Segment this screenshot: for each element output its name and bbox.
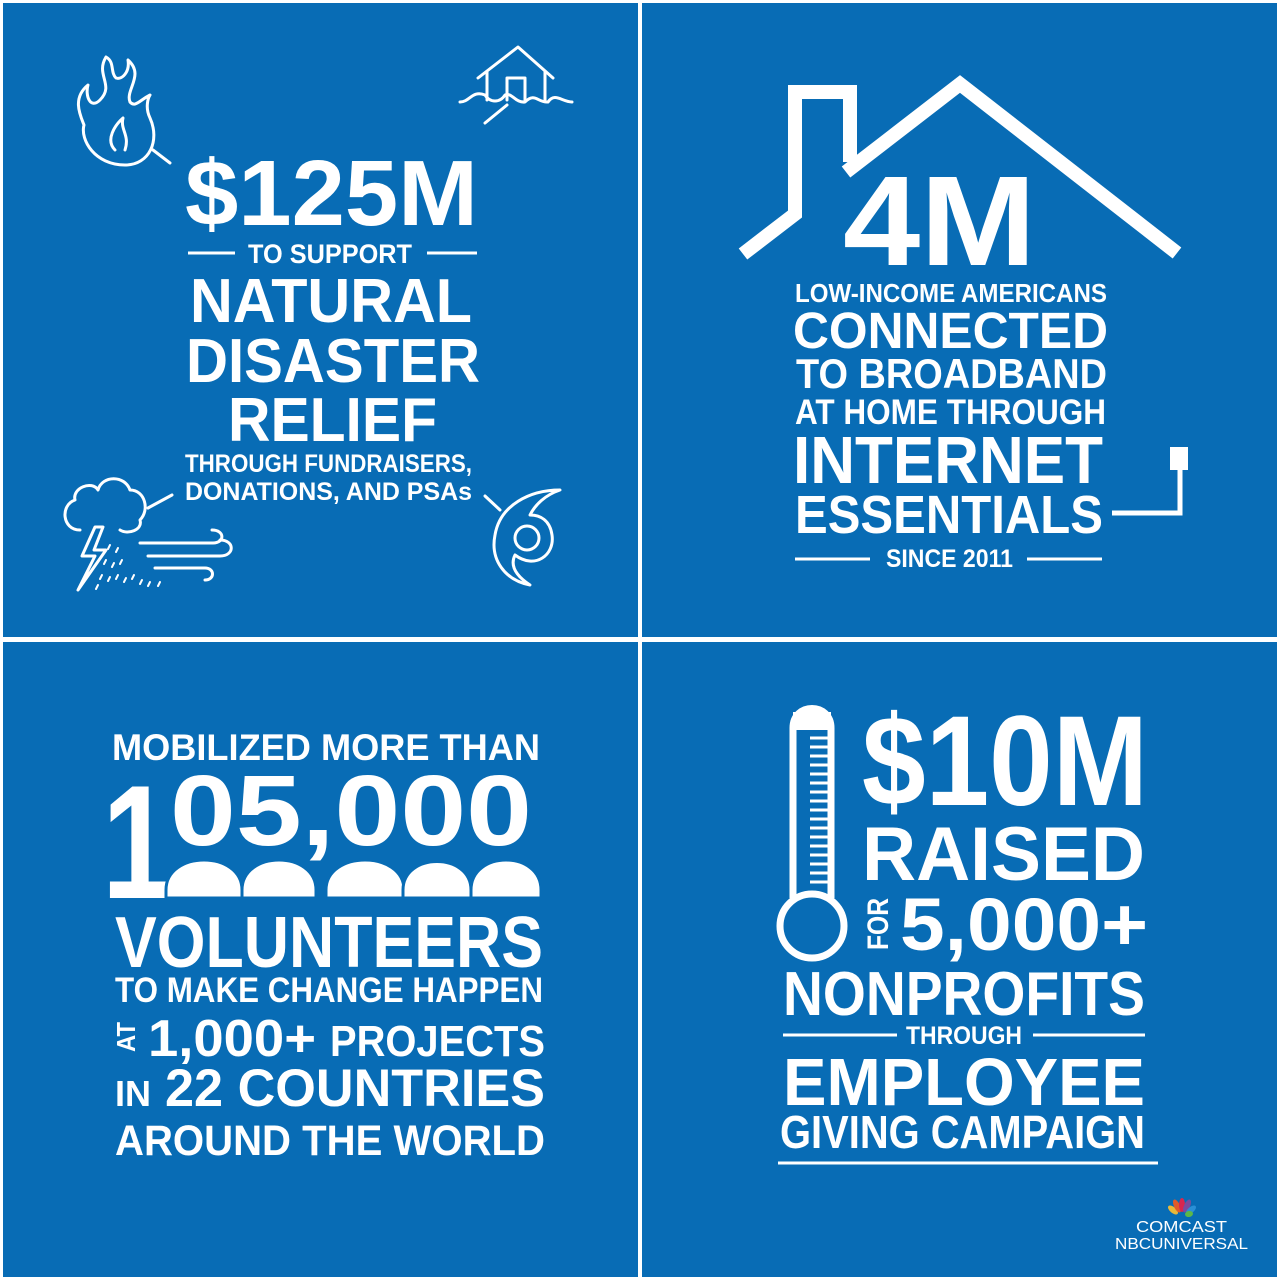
text: raised for nonprofits: NONPROFITS [783,960,1145,1029]
logo: comcast nbcuniversal [1115,1198,1248,1253]
text: to support: TO SUPPORT [248,239,412,269]
panel: employee giving [642,642,1277,1277]
text: broadband lines: CONNECTED [793,302,1108,359]
text: $125M: $125M [185,141,478,245]
text: 105,000 with people: 1 [102,752,172,933]
text: volunteers: VOLUNTEERS [115,903,543,983]
panel: disaster relief [3,3,638,637]
text: through fundraisers: DONATIONS, AND PSAs [185,478,472,506]
text: broadband lines: INTERNET [793,423,1103,498]
text: 105,000 with people [102,752,541,933]
text: employee giving campaign [778,1045,1158,1163]
panel: internet essentials [642,3,1277,637]
heading: natural disaster relief: DISASTER [186,327,480,396]
text: broadband lines: ESSENTIALS [795,485,1103,545]
heading: natural disaster relief: RELIEF [228,386,437,455]
text: 4M: 4M [843,150,1036,293]
text: project details: AT [111,1022,141,1052]
text: raised for nonprofits: FOR [862,898,895,950]
text: employee giving campaign: GIVING CAMPAIGN [780,1106,1145,1158]
icon: fire [78,57,170,165]
text: broadband lines: AT HOME THROUGH [795,393,1106,432]
text: raised for nonprofits: 5,000+ [900,883,1148,966]
text: raised for nonprofits: RAISED [862,812,1145,897]
heading: natural disaster relief: NATURAL [190,267,472,336]
text: project details: IN [115,1073,151,1114]
text: through: THROUGH [906,1022,1022,1050]
heading: natural disaster relief [186,267,480,455]
text: broadband lines: LOW-INCOME AMERICANS [795,278,1107,308]
text: project details: AROUND THE WORLD [115,1117,545,1165]
text: mobilized more than: MOBILIZED MORE THAN [112,727,540,768]
text: 105,000 with people: 05,000 [170,755,532,867]
icon: cable plug [1112,447,1188,513]
text: through fundraisers: THROUGH FUNDRAISERS, [185,450,472,478]
text: project details [111,971,545,1165]
text: project details: 1,000+ [148,1010,316,1068]
icon: thermometer [780,708,844,958]
logo: comcast nbcuniversal: NBCUNIVERSAL [1115,1236,1248,1253]
text: project details: TO MAKE CHANGE HAPPEN [115,971,543,1010]
text: broadband lines: TO BROADBAND [796,350,1107,397]
text: project details: PROJECTS [330,1017,545,1066]
text: $10M: $10M [862,690,1148,833]
text: raised for nonprofits [783,812,1148,1029]
icon: storm cloud with wind [65,479,231,590]
icon: hurricane [485,490,560,585]
icon: flooded house [460,47,572,123]
text: broadband lines [793,278,1108,545]
text: through fundraisers [185,450,472,506]
icon: house outline [743,84,1177,254]
logo: comcast nbcuniversal: COMCAST [1136,1219,1227,1236]
panel: volunteers [3,642,638,1277]
text: since 2011: SINCE 2011 [886,545,1013,573]
icon: crowd heads [166,860,541,898]
text: project details: 22 COUNTRIES [165,1059,545,1118]
text: employee giving campaign: EMPLOYEE [783,1045,1145,1120]
